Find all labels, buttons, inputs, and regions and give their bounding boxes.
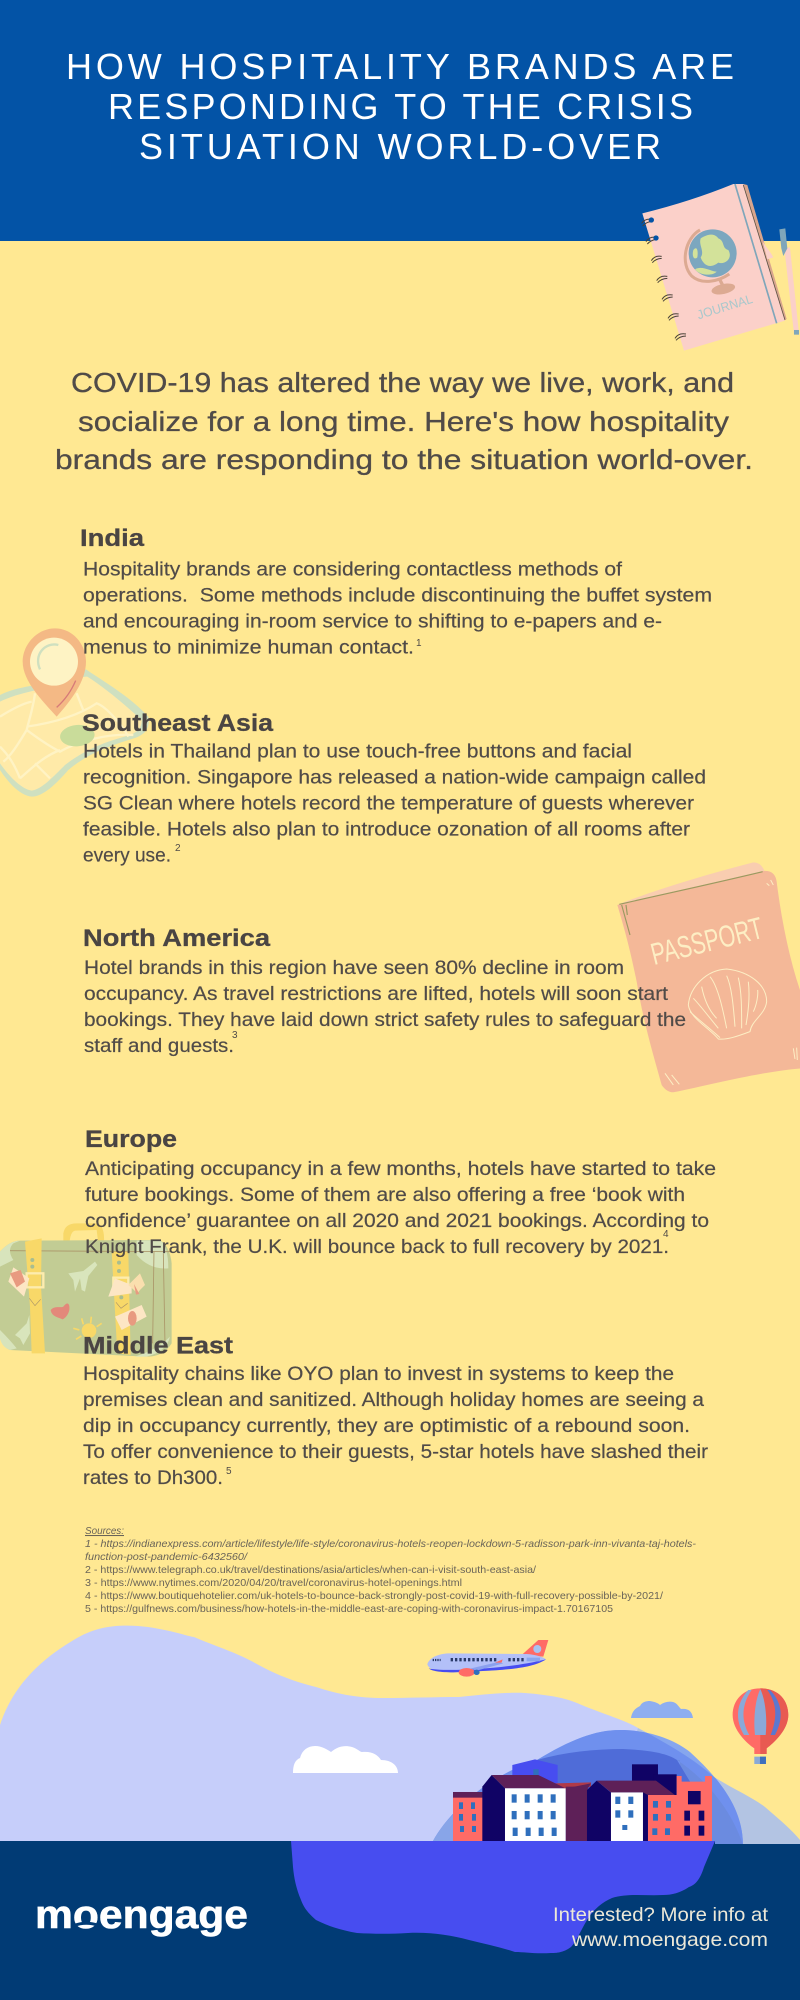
section: India: and encouraging in-room service to shifting to e-papers and e-: [83, 610, 662, 632]
call to action: Interested? More info at: [553, 1904, 769, 1926]
section: Middle East: Hospitality chains like OYO plan to invest in systems to keep the: [83, 1363, 674, 1385]
section: North America: 3: [232, 1030, 238, 1041]
section: North America: [83, 925, 686, 1057]
section: Middle East: premises clean and sanitized. Although holiday homes are seeing a: [83, 1389, 704, 1411]
section: Southeast Asia: [82, 710, 706, 867]
sources: 3 - https://www.nytimes.com/2020/04/20/travel/coronavirus-hotel-openings.html: [85, 1577, 462, 1589]
section: Europe: [85, 1126, 716, 1258]
section: Middle East: dip in occupancy currently, they are optimistic of a rebound soon.: [83, 1415, 690, 1437]
header band: [0, 0, 800, 241]
icon: passport: [617, 862, 800, 1092]
sources: Sources:: [85, 1525, 124, 1537]
section: Europe: confidence’ guarantee on all 2020 and 2021 bookings. According to: [85, 1210, 709, 1232]
icon: journal and pen: JOURNAL: [695, 292, 754, 322]
intro text: [55, 367, 753, 475]
icon: blue cloud: [631, 1701, 693, 1718]
section: Southeast Asia: feasible. Hotels also plan to introduce ozonation of all rooms after: [83, 819, 691, 841]
island: [291, 1841, 715, 1953]
intro text: COVID-19 has altered the way we live, work, and: [71, 367, 734, 398]
icon: hot air balloon: [733, 1688, 788, 1764]
section: India: [80, 525, 712, 658]
title: [66, 46, 734, 167]
icon: white cloud: [293, 1746, 398, 1773]
call to action: www.moengage.com: [571, 1929, 768, 1951]
section: India: India: [80, 525, 144, 552]
title: RESPONDING TO THE CRISIS: [108, 86, 693, 127]
title: SITUATION WORLD-OVER: [139, 126, 661, 167]
icon: journal and pen: [642, 184, 799, 351]
section: Southeast Asia: SG Clean where hotels record the temperature of guests wherever: [83, 793, 695, 815]
section: India: operations. Some methods include discontinuing the buffet system: [83, 584, 712, 606]
section: Europe: Europe: [85, 1126, 177, 1153]
sources: [85, 1525, 697, 1615]
hills behind buildings: [433, 1730, 743, 1845]
section: Southeast Asia: Southeast Asia: [82, 710, 273, 737]
icon: suitcase: [0, 1223, 172, 1357]
section: Southeast Asia: recognition. Singapore has released a nation-wide campaign called: [83, 767, 706, 789]
section: Middle East: rates to Dh300.: [83, 1467, 223, 1489]
section: North America: North America: [83, 925, 270, 952]
icon: map with location pin: [0, 628, 149, 797]
section: Europe: Anticipating occupancy in a few months, hotels have started to take: [85, 1158, 716, 1180]
section: Europe: 4: [663, 1229, 669, 1240]
section: North America: occupancy. As travel restrictions are lifted, hotels will soon start: [84, 983, 669, 1005]
section: North America: staff and guests.: [84, 1035, 234, 1057]
icon: airplane: [427, 1640, 548, 1677]
section: India: menus to minimize human contact.: [83, 636, 414, 658]
sources: 1 - https://indianexpress.com/article/lifestyle/life-style/coronavirus-hotels-reopen-lockdown-5-radisson-park-inn-vivanta-taj-hotels-: [85, 1538, 697, 1550]
sources: 2 - https://www.telegraph.co.uk/travel/destinations/asia/articles/when-can-i-visit-south-east-asia/: [85, 1564, 536, 1576]
title: HOW HOSPITALITY BRANDS ARE: [66, 46, 734, 87]
section: Middle East: 5: [226, 1466, 232, 1477]
section: Southeast Asia: 2: [175, 843, 181, 854]
section: Southeast Asia: every use.: [83, 845, 171, 867]
section: Middle East: Middle East: [83, 1332, 233, 1360]
section: Europe: future bookings. Some of them are also offering a free ‘book with: [85, 1184, 685, 1206]
sources: 5 - https://gulfnews.com/business/how-hotels-in-the-middle-east-are-coping-with-coronavirus-impact-1.70167105: [85, 1603, 613, 1615]
section: North America: Hotel brands in this region have seen 80% decline in room: [84, 957, 624, 979]
section: Middle East: To offer convenience to their guests, 5-star hotels have slashed their: [83, 1441, 709, 1463]
call to action: [553, 1904, 769, 1951]
sources: 4 - https://www.boutiquehotelier.com/uk-hotels-to-bounce-back-strongly-post-covid-19-with-full-recovery-possible-by-2021/: [85, 1590, 663, 1602]
section: India: 1: [416, 638, 422, 649]
section: Middle East: [83, 1332, 709, 1489]
section: India: Hospitality brands are considering contactless methods of: [83, 558, 623, 580]
logo: moengage: [35, 1893, 248, 1937]
section: Europe: Knight Frank, the U.K. will bounce back to full recovery by 2021.: [85, 1236, 669, 1258]
intro text: socialize for a long time. Here's how hospitality: [78, 406, 729, 437]
landscape hill: [0, 1626, 800, 1850]
footer band: [0, 1841, 800, 2000]
buildings: [453, 1759, 712, 1841]
section: North America: bookings. They have laid down strict safety rules to safeguard the: [84, 1009, 686, 1031]
sources: function-post-pandemic-6432560/: [85, 1551, 248, 1563]
section: Southeast Asia: Hotels in Thailand plan to use touch-free buttons and facial: [83, 740, 632, 762]
intro text: brands are responding to the situation world-over.: [55, 444, 753, 475]
